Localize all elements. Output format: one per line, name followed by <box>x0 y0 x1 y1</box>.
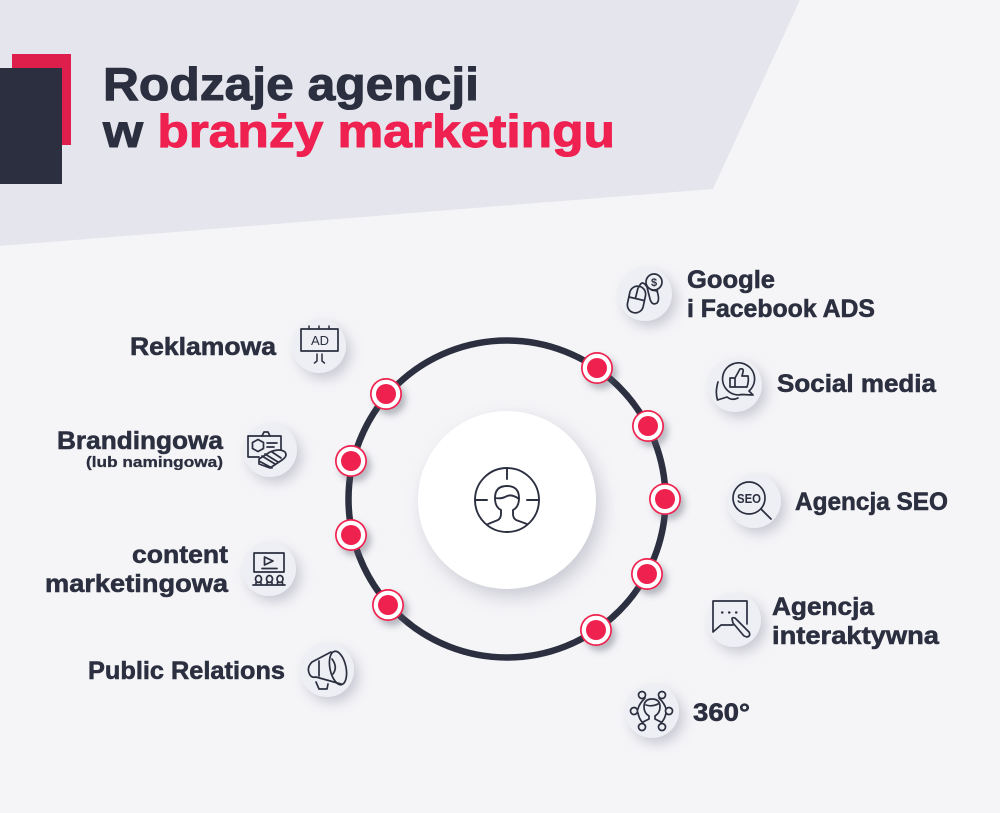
item: Agencja interaktywna: Agencja <box>772 593 875 621</box>
item: 360 <box>625 684 750 738</box>
item: Google i Facebook ADS: Google <box>687 266 775 294</box>
item: Public Relations: Public Relations <box>88 657 285 685</box>
item: content marketingowa: marketingowa <box>45 570 229 598</box>
icon: card and handshake <box>248 432 286 468</box>
icon: AD billboard <box>301 326 338 363</box>
icon: network around person <box>630 692 672 730</box>
item: Reklamowa: AD <box>311 333 329 348</box>
icon: chat and pen <box>713 601 750 637</box>
item: Social media <box>708 358 937 412</box>
item: Brandingowa: (lub namingowa) <box>86 454 223 471</box>
item: Agencja SEO: Agencja SEO <box>795 488 948 516</box>
item: 360: 360° <box>693 699 750 727</box>
timeline dots <box>335 352 681 646</box>
icon: person in target <box>475 468 539 532</box>
central ring <box>348 340 666 658</box>
item: Agencja SEO: SEO <box>737 492 761 506</box>
item: Agencja interaktywna: interaktywna <box>772 622 940 650</box>
title: Rodzaje agencji <box>103 58 479 110</box>
item: Agencja interaktywna <box>707 593 940 650</box>
item: Reklamowa <box>130 319 346 373</box>
icon: thumbs up speech bubble <box>716 363 755 400</box>
icon: SEO magnifier <box>733 482 771 519</box>
icon: mouse and dollar <box>626 274 662 314</box>
title: w branży marketingu <box>102 105 615 157</box>
header background shape <box>0 0 800 246</box>
item: Google i Facebook ADS: i Facebook ADS <box>687 295 875 323</box>
icon: megaphone <box>308 650 349 689</box>
title <box>102 58 615 157</box>
central white circle with person icon <box>418 411 596 589</box>
header accent: dark square <box>0 68 62 184</box>
item: Google i Facebook ADS: $ <box>651 277 657 289</box>
header accent: red square <box>12 54 71 145</box>
item: Public Relations <box>88 643 354 697</box>
item: Social media: Social media <box>777 370 937 398</box>
item: content marketingowa <box>45 541 296 598</box>
item: Agencja SEO <box>727 474 948 528</box>
item: Reklamowa: Reklamowa <box>130 333 277 361</box>
icon: video presentation <box>253 553 285 585</box>
item: Brandingowa <box>57 423 297 477</box>
item: Brandingowa: Brandingowa <box>57 427 224 455</box>
item: content marketingowa: content <box>132 541 229 569</box>
item: Google i Facebook ADS <box>618 266 875 323</box>
